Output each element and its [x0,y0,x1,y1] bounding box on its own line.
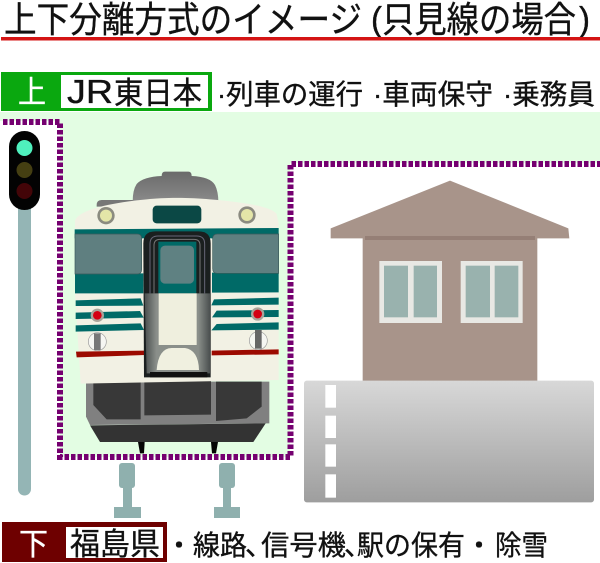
icon: rail right [214,463,240,518]
lower duties text: 、 [344,530,372,561]
right window [461,261,523,323]
icon: rail left [114,463,141,518]
title underline [1,37,600,40]
marker lamps [88,307,267,351]
road / platform [304,381,594,502]
label box: JR East: JR [67,73,113,110]
headlights [97,207,115,224]
train body [75,198,279,384]
label box: Fukushima: 下 [19,527,48,562]
house roof [331,181,569,238]
lower duties text: 線路 [193,530,247,561]
lower duties text: 駅の保有 [357,530,465,561]
lower duties text: 除雪 [495,530,548,561]
title: 上下分離方式のイメージ [4,0,362,40]
signal head [9,131,40,210]
icon: signal [9,131,40,496]
signal pole [18,205,31,496]
undercarriage [86,380,269,453]
center door [143,231,211,377]
lower duties text [165,530,548,561]
dotted boundary line [3,122,600,457]
left window [379,261,442,323]
label box: JR East: 上 [18,75,46,110]
train roof [133,172,218,202]
train [75,172,279,453]
label box: Fukushima [2,522,167,562]
lower label row [2,522,548,562]
lower duties text: 信号機 [261,530,346,561]
upper duties text [217,79,595,110]
side windows [75,234,142,274]
lower duties text: ・ [165,530,193,561]
upper label row [1,72,595,111]
green upper background [0,112,600,457]
red stripes [76,351,145,357]
upper duties text: ·列車の運行 [217,79,363,110]
teal bands [75,228,279,332]
lower duties text: ・ [465,530,493,561]
title: ) [579,1,590,39]
title: 只見線の場合 [382,0,576,40]
label box: JR East: 東日本 [114,76,202,111]
upper duties text: ·乗務員 [503,79,595,110]
upper duties text: ·車両保守 [373,79,493,110]
house wall [363,237,537,381]
label box: Fukushima: 福島県 [70,527,160,562]
house [304,181,594,502]
title: ( [371,1,383,39]
destination sign [153,206,201,223]
label box: JR East [1,72,212,111]
title [4,0,590,40]
lower duties text: 、 [245,530,273,561]
